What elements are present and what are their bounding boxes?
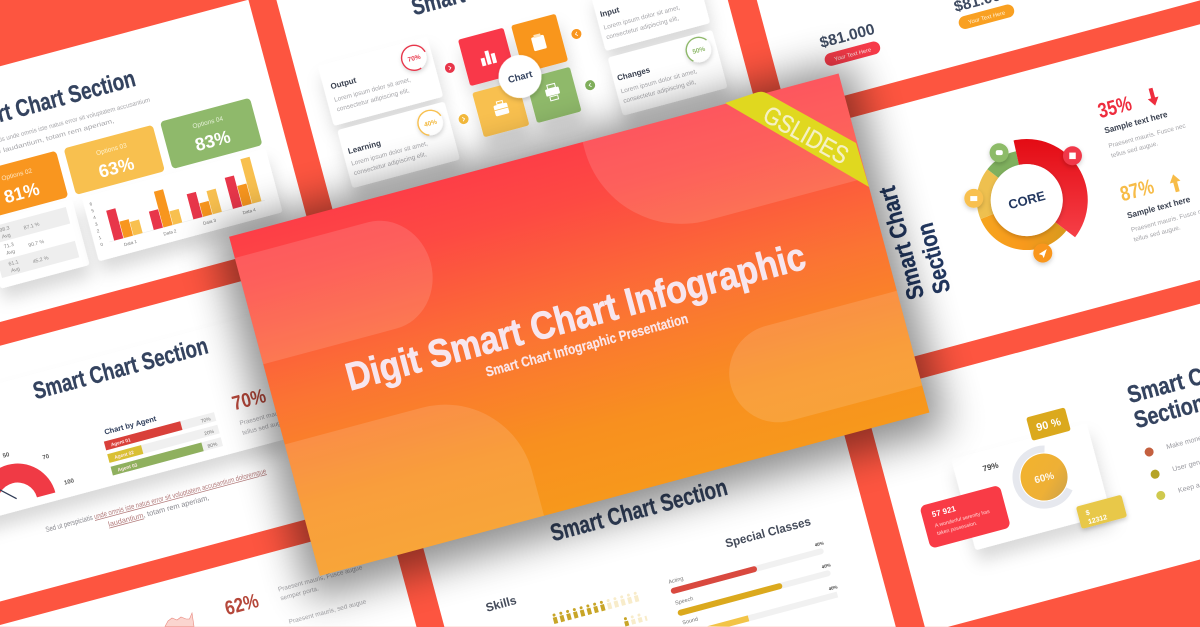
option card 03: Options 03 (95, 142, 128, 157)
heading: Smart Chart Section (548, 474, 730, 547)
panel: changes: Lorem ipsum dolor sit amet, (620, 68, 698, 95)
ring: 50%: 50% (692, 46, 706, 56)
chart by agent: Agent 03 (117, 462, 138, 473)
stat: 87% up: 87% (1118, 175, 1157, 206)
value: red: $81.000 (818, 21, 877, 52)
panel: learning (337, 101, 460, 188)
tag: $ 12312 (1076, 495, 1127, 529)
people pictogram row 1 (552, 592, 641, 621)
panel: learning: Learning (347, 138, 382, 156)
chart by agent: Agent 01 (110, 437, 132, 448)
tile: orange with clipboard icon (511, 14, 568, 73)
panel: learning: consectetur adipiscing elit, (353, 151, 428, 177)
vertical heading (874, 176, 956, 303)
bar chart panel: 1 (98, 235, 102, 240)
bar chart panel: Data 3 (202, 218, 217, 226)
data table: Avg (6, 249, 16, 257)
panel: changes (608, 30, 727, 116)
ring: 70% (394, 38, 434, 77)
data table: 90.7 % (28, 239, 45, 249)
tag: 90% (1026, 407, 1071, 441)
progress: speech: 40% (821, 562, 831, 570)
option card 02: 81% (2, 179, 42, 207)
text: praesent block one: semper porta. (280, 585, 320, 602)
gauge: 70 (42, 454, 51, 461)
gauge (0, 438, 76, 513)
main card shadow (212, 60, 948, 600)
tag: $ 12312: 12312 (1087, 514, 1108, 526)
stat: 87% up (1118, 163, 1200, 244)
ring: 40% (411, 103, 450, 142)
value: red (818, 21, 882, 67)
bar chart panel: 6 (89, 201, 93, 207)
bar chart panel: 0 (100, 242, 104, 247)
panel: output (318, 37, 443, 126)
centre circle: chart: Chart (507, 69, 534, 86)
panel: output: consectetur adipiscing elit, (336, 87, 410, 113)
core donut chart: CORE (1007, 188, 1047, 212)
data table: Avg (10, 266, 21, 274)
bar chart panel: Data 1 (123, 239, 138, 247)
chart by agent: 70% (200, 416, 212, 425)
stat: 70%: 70% (230, 385, 269, 415)
bar chart panel: 4 (93, 215, 97, 220)
stat: 35% down (1095, 80, 1190, 160)
tag: $ 12312: $ (1085, 510, 1091, 517)
progress: sound: 40% (828, 584, 838, 592)
caption with underlined text: laudantium, totam rem aperiam, (107, 493, 210, 529)
progress: speech (675, 559, 833, 616)
caption with underlined text: Sed ut perspiciatis unde omnis iste natus error sit voluptatem accusantium doloremque (44, 466, 267, 534)
main title card (229, 73, 929, 576)
label: 79%: 79% (982, 461, 1000, 473)
bullet list (1144, 430, 1200, 501)
decorative shape: top right (583, 73, 867, 246)
progress: acting: 40% (814, 540, 824, 548)
panel: learning: Lorem ipsum dolor sit amet, (351, 140, 429, 168)
slide: middle-left gauge (0, 261, 382, 621)
progress: speech: Speech (675, 596, 694, 607)
bar chart panel: Data 4 (242, 207, 257, 215)
panel (0, 316, 283, 541)
ball: 60%: 60% (1033, 471, 1056, 486)
slide: bottom-right tags (782, 214, 1200, 627)
stat: 35% down: tellus sed augue. (1110, 140, 1159, 160)
ribbon: GSLIDES (725, 92, 869, 187)
bar chart panel: 5 (91, 208, 95, 213)
slide: top-left options chart (0, 0, 312, 357)
stat: 70%: tellus sed augue. (242, 418, 290, 437)
chart by agent: 80% (207, 441, 219, 450)
data table: Avg (1, 232, 12, 240)
chart by agent (100, 399, 223, 475)
text: praesent block one: Praesent mauris, Fusce augue (277, 564, 364, 593)
gauge: 100 (64, 478, 75, 487)
bar chart panel: 2 (96, 228, 100, 234)
subtitle: Smart Chart Infographic Presentation (484, 310, 690, 380)
panel: output: Output (330, 76, 358, 91)
ball: 60% (1015, 448, 1073, 506)
bar chart panel: 3 (94, 221, 99, 227)
bar chart panel (82, 148, 283, 261)
stat: 70% (230, 373, 321, 437)
centre circle: chart (494, 50, 546, 103)
option card 03: 63% (96, 153, 136, 182)
data table: 61.1 (8, 259, 19, 268)
stat: 35% down: Sample text here (1103, 109, 1169, 135)
value: orange: Your Text Here (968, 10, 1006, 26)
chart by agent: Agent 02 (114, 450, 135, 461)
panel: input (590, 0, 710, 51)
tile: green with printer icon (525, 67, 582, 123)
tag: 90%: 90 % (1035, 416, 1063, 434)
option card 04 (160, 98, 262, 169)
slide: middle-right core (763, 20, 1200, 380)
option card 04: Options 04 (192, 115, 224, 130)
vertical heading: Section (912, 220, 956, 296)
data table: 87.1 % (23, 221, 41, 232)
stat: 87% up: Sample text here (1126, 194, 1192, 220)
decorative shape: bottom right (718, 291, 922, 433)
ring: 40%: 40% (424, 119, 438, 129)
heading (1124, 353, 1200, 434)
option card 02 (0, 151, 68, 220)
core donut chart (964, 139, 1088, 263)
stat: 35% down: Praesent mauris. Fusce nec (1108, 122, 1187, 150)
people pictogram row 2 (624, 613, 647, 624)
slide: top-right revenue (723, 0, 1200, 111)
progress ring (1007, 440, 1081, 514)
tag: 57 921: 57 921 (931, 504, 957, 519)
decorative shape: bottom left (285, 384, 544, 576)
heading: Smart Chart Section (30, 333, 211, 405)
stat: 70%: Praesent mauris. Fusce nec (239, 400, 318, 427)
progress: sound: Sound (682, 617, 699, 626)
special classes heading: Special Classes (724, 514, 813, 551)
main title: Digit Smart Chart Infographic (341, 235, 810, 399)
bar chart panel: Data 2 (163, 228, 177, 237)
panel: input: Input (599, 5, 621, 19)
tag: 57 921: taken possession. (936, 520, 978, 537)
gauge: 50 (2, 452, 11, 460)
stat: 62%: 62% (223, 590, 261, 620)
ring: 50% (677, 28, 720, 71)
slide: top-middle chart tiles (274, 0, 760, 231)
ring: 70%: 70% (407, 54, 422, 64)
value: orange (952, 0, 1016, 30)
text: praesent block two: Praesent mauris, sed augue (288, 598, 367, 626)
progress: acting: Acting (668, 576, 684, 586)
option card 02: Options 02 (1, 168, 33, 183)
slide: bottom-left line chart (0, 417, 443, 627)
ribbon: GSLIDES: GSLIDES (758, 101, 853, 170)
area chart (165, 613, 194, 626)
panel (951, 423, 1111, 550)
tile: yellow with briefcase icon (472, 81, 529, 137)
caption with underlined text (44, 466, 270, 545)
tag: 57 921 (919, 485, 1011, 549)
stat: 35% down: 35% (1095, 92, 1134, 123)
panel: changes: Changes (616, 65, 652, 83)
value: red: Your Text Here (834, 47, 872, 63)
data table: 45.2 % (32, 255, 50, 265)
arrow bullets (444, 28, 596, 125)
option card 03 (64, 125, 165, 195)
panel: input: consectetur adipiscing elit, (606, 15, 680, 41)
progress: sound (682, 580, 840, 627)
vertical heading: Smart Chart (874, 183, 930, 302)
chart by agent: 20% (204, 429, 215, 437)
panel: output: Lorem ipsum dolor sit amet, (333, 77, 412, 104)
chart by agent: Chart by Agent (103, 414, 158, 437)
data table: 71.3 (3, 242, 15, 250)
progress: acting (668, 538, 826, 594)
skills heading: Skills (484, 593, 518, 615)
panel: changes: consectetur adipiscing elit, (623, 79, 697, 105)
data table (0, 199, 90, 289)
slide: bottom-middle skills (358, 281, 952, 627)
tag: 57 921: A wonderful serenity has (934, 509, 991, 529)
decorative shape: top left (235, 209, 445, 364)
tile: red with bar icon (458, 28, 516, 86)
stat: 87% up: tellus sed augue. (1133, 224, 1182, 244)
panel: input: Lorem ipsum dolor sit amet, (603, 4, 681, 32)
option card 04: 83% (193, 126, 233, 155)
